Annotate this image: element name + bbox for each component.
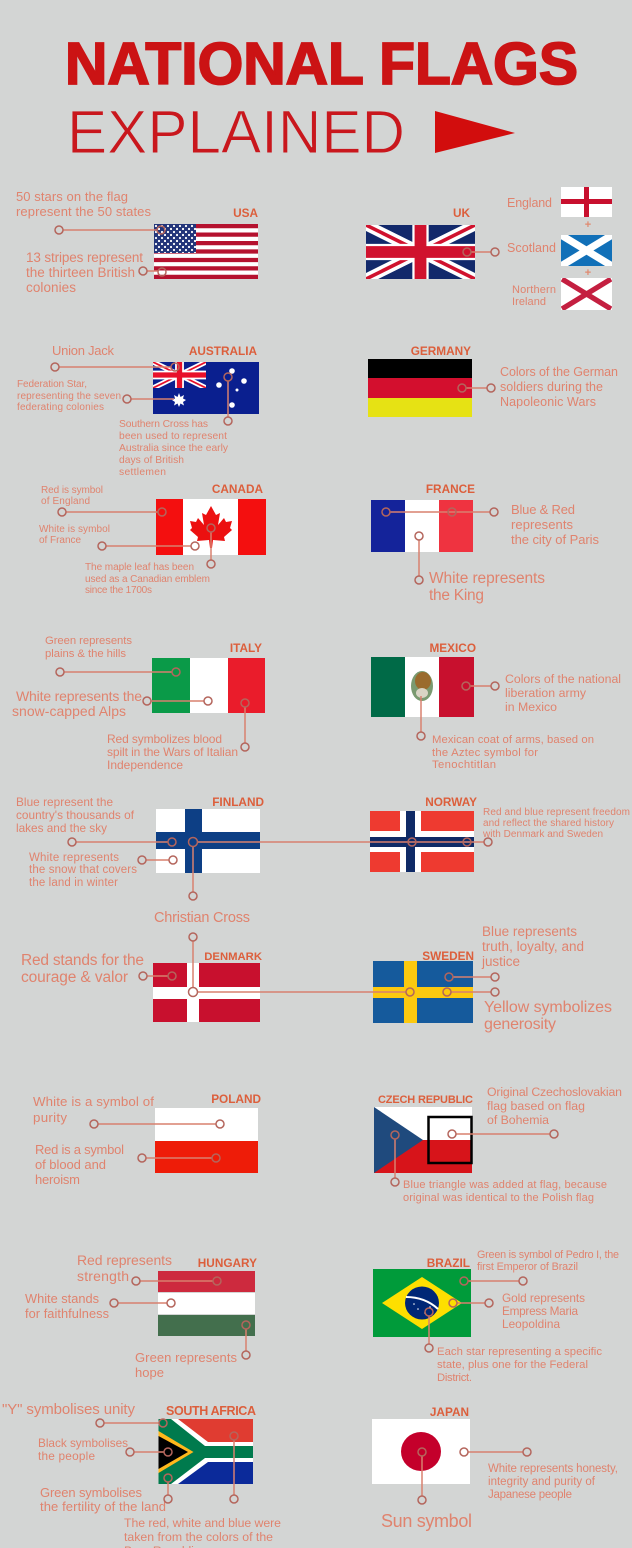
leader: green [164, 1474, 172, 1503]
text: Norway: with Denmark and Sweden [482, 829, 603, 840]
text: black: the people [38, 1449, 95, 1463]
text: stars: 50 stars on the flag [16, 189, 128, 204]
label: Mexico: MEXICO [429, 641, 476, 655]
text: red [21, 952, 144, 986]
flag: Australia [153, 362, 259, 414]
panel: Denmark [21, 933, 263, 1022]
text: coat of arms: Tenochtitlan [432, 759, 496, 771]
text: plus: + [585, 267, 591, 279]
text: black: Black symbolises [38, 1436, 128, 1450]
text: Norway: Red and blue represent freedom [483, 807, 630, 818]
flag: Norway [370, 811, 474, 872]
label: Denmark: DENMARK [204, 951, 263, 963]
text: red: Red represents [77, 1252, 172, 1268]
text: white: for faithfulness [25, 1306, 109, 1321]
text: maple leaf: since the 1700s [85, 585, 152, 596]
text: colors: liberation army [505, 686, 587, 700]
label: Czech Republic: CZECH REPUBLIC [378, 1094, 473, 1106]
text: white: White is symbol [39, 524, 110, 535]
text: unity: "Y" symbolises unity [2, 1401, 136, 1418]
text: white: White represents honesty, [488, 1463, 618, 1475]
text: red: Red is symbol [41, 485, 103, 496]
flag: Mexico [371, 657, 474, 717]
text: red: of blood and [35, 1157, 106, 1172]
text: white: White stands [25, 1291, 99, 1306]
text: Southern Cross: been used to represent [119, 431, 227, 442]
leader: green [56, 668, 180, 676]
panel: Australia [17, 343, 259, 478]
text: Germany: Colors of the German [500, 365, 618, 379]
text: red: Independence [107, 758, 183, 772]
text: coat of arms: the Aztec symbol for [432, 747, 538, 759]
panel: Japan [372, 1405, 618, 1531]
text: gold: Gold represents [502, 1291, 585, 1305]
text: yellow: Yellow symbolizes [484, 999, 612, 1016]
panel: Italy [12, 635, 265, 772]
text: white [488, 1463, 618, 1501]
text: Germany [500, 365, 618, 409]
text: original [487, 1085, 622, 1127]
label: South Africa: SOUTH AFRICA [166, 1404, 256, 1418]
panel: Czech Republic [374, 1085, 622, 1204]
panel: Canada [39, 482, 266, 596]
text: maple leaf: The maple leaf has been [85, 562, 194, 573]
leader: white [143, 697, 212, 705]
flag: USA [154, 224, 258, 279]
leader: Southern Cross [224, 373, 232, 425]
text: white: White represents [429, 570, 545, 587]
text: red: heroism [35, 1172, 80, 1187]
panel: USA [16, 189, 258, 295]
label: Poland: POLAND [211, 1092, 261, 1106]
text: blue and red: the city of Paris [511, 532, 600, 547]
text: red: Red symbolizes blood [107, 732, 222, 746]
text: triangle [403, 1179, 607, 1204]
leader: cross down [189, 847, 197, 900]
text: Southern Cross [119, 419, 229, 478]
text: yellow: generosity [484, 1016, 556, 1033]
text: stripes: the thirteen British [26, 265, 135, 280]
text: star: state, plus one for the Federal [437, 1359, 588, 1371]
text: white: the King [429, 587, 484, 604]
text: blue: Blue represent the [16, 795, 113, 809]
label: USA: USA [233, 206, 258, 220]
text: Germany: soldiers during the [500, 380, 603, 394]
leader: maple leaf [207, 524, 215, 568]
leader: red [58, 508, 166, 516]
leader: white [460, 1448, 531, 1456]
text: Southern Cross: Southern Cross has [119, 419, 208, 430]
text: red white blue: taken from the colors of the [124, 1530, 273, 1544]
text: red: courage & valor [21, 969, 128, 986]
text: white: the land in winter [29, 877, 118, 889]
flag: Northern Ireland [561, 278, 612, 310]
text: blue [481, 924, 584, 969]
panel: Hungary [25, 1252, 257, 1380]
text: plus: + [585, 219, 591, 231]
leader: coat of arms [417, 696, 425, 740]
leader: Union Jack [51, 363, 179, 371]
panel: UK [366, 187, 612, 310]
flag: England [561, 187, 612, 217]
text: red white blue [124, 1516, 281, 1548]
text: white: the snow that covers [29, 864, 137, 876]
text: green: plains & the hills [45, 648, 126, 660]
text: star: District. [437, 1372, 472, 1384]
text: Southern Cross: days of British [119, 455, 184, 466]
text: stripes [26, 250, 143, 295]
text: white: integrity and purity of [488, 1476, 596, 1488]
text: Germany: Napoleonic Wars [500, 395, 596, 409]
panel: Poland [33, 1092, 261, 1187]
leader: green [242, 1321, 250, 1359]
label: Brazil: BRAZIL [427, 1256, 470, 1270]
text: green: hope [135, 1365, 164, 1380]
heading: national flags: NATIONAL FLAGS [65, 31, 578, 97]
leader: original [448, 1130, 558, 1138]
text: blue [16, 795, 135, 835]
text: white [39, 524, 110, 546]
label: Norway: NORWAY [425, 795, 477, 809]
flag: Italy [152, 658, 265, 713]
label: Germany: GERMANY [411, 344, 471, 358]
label: Finland: FINLAND [212, 795, 264, 809]
flag: France [371, 500, 473, 552]
text: red [107, 732, 238, 772]
text: blue: country's thousands of [16, 808, 135, 822]
leader: Denmark to Sweden [188, 988, 414, 996]
flag: Sweden [373, 961, 473, 1023]
flag: Brazil [373, 1269, 471, 1337]
flag: Finland [156, 809, 260, 873]
text: colors [505, 672, 621, 714]
text: Norway: and reflect the shared history [483, 818, 614, 829]
label: Italy: ITALY [230, 641, 262, 655]
text: coat of arms [432, 734, 594, 771]
label: Canada: CANADA [212, 482, 263, 496]
text: blue: truth, loyalty, and [482, 939, 584, 954]
text: green: Green is symbol of Pedro I, the [477, 1249, 619, 1261]
text: red [77, 1252, 172, 1284]
flag: Poland [155, 1108, 258, 1173]
text: blue: justice [481, 954, 520, 969]
text: white [12, 688, 142, 719]
text: red: Red stands for the [21, 952, 144, 969]
panel: Brazil [373, 1249, 619, 1384]
text: sun: Sun symbol [381, 1511, 472, 1531]
leader: blue [445, 973, 499, 981]
text: Scotland: Scotland [507, 241, 556, 255]
text: white [429, 570, 545, 604]
text: green [45, 635, 132, 660]
leader: red [139, 972, 176, 980]
leader: red [138, 1154, 220, 1162]
text: white: snow-capped Alps [12, 703, 126, 719]
flag: Denmark [153, 963, 260, 1022]
text: maple leaf [85, 562, 210, 596]
text: Northern Ireland: Northern [512, 284, 556, 296]
text: colors: Colors of the national [505, 672, 621, 686]
leader: blue [68, 838, 176, 846]
text: white: Japanese people [488, 1489, 572, 1501]
text: England: England [507, 196, 552, 210]
text: red: spilt in the Wars of Italian [107, 745, 238, 759]
leader: green [460, 1277, 527, 1285]
text: original: flag based on flag [487, 1099, 585, 1113]
text: gold: Empress Maria [502, 1304, 578, 1318]
panel: Sweden [373, 924, 612, 1033]
text: green [477, 1249, 619, 1273]
text: white [29, 852, 137, 889]
leader: unity [96, 1419, 167, 1427]
flag: South Africa [158, 1419, 253, 1484]
panel: Mexico [371, 641, 621, 771]
text: red [41, 485, 103, 507]
text: Norway [482, 807, 630, 840]
text: blue and red: Blue & Red [511, 502, 575, 517]
icon: coat of arms [411, 671, 433, 701]
text: stars [16, 189, 152, 219]
text: white: White represents [29, 852, 119, 864]
text: green: the fertility of the land [40, 1499, 166, 1514]
text: green: first Emperor of Brazil [477, 1261, 578, 1273]
text: white [25, 1291, 109, 1321]
leader: stripes [139, 267, 166, 276]
text: white: purity [33, 1110, 67, 1125]
text: gold [502, 1291, 585, 1331]
leader: white [138, 856, 177, 864]
text: red: of England [41, 496, 90, 507]
leader: white [110, 1299, 175, 1307]
text: blue: lakes and the sky [16, 821, 107, 835]
text: green: Green symbolises [40, 1485, 142, 1500]
text: maple leaf: used as a Canadian emblem [85, 574, 210, 585]
text: colors: in Mexico [505, 700, 557, 714]
leader: yellow [443, 988, 499, 996]
text: stripes: colonies [26, 280, 76, 295]
text: original: of Bohemia [487, 1113, 549, 1127]
leader: cross up [189, 933, 197, 988]
panel: Germany [368, 344, 618, 417]
text: red white blue: The red, white and blue were [124, 1516, 281, 1530]
leader: blue and red [382, 508, 498, 516]
leader: white [98, 542, 199, 550]
label: Japan: JAPAN [430, 1405, 469, 1419]
text: green: Green represents [45, 635, 132, 647]
text: blue and red [511, 502, 600, 547]
text: stripes: 13 stripes represent [26, 250, 143, 265]
leader: red [132, 1277, 221, 1285]
leader: black [126, 1448, 172, 1456]
text: Federation Star: representing the seven [17, 391, 121, 402]
text: white: of France [39, 535, 81, 546]
leader: white [415, 532, 423, 584]
flag: Germany [368, 359, 472, 417]
leader: Federation Star [123, 395, 174, 403]
leader: red [241, 699, 249, 751]
flag: Czech Republic [374, 1107, 472, 1173]
text: black [38, 1436, 128, 1463]
title [65, 31, 578, 166]
text: Southern Cross: settlemen [119, 467, 166, 478]
flag: Japan [372, 1419, 470, 1484]
text: Union Jack: Union Jack [52, 343, 114, 358]
text: green [40, 1485, 166, 1514]
panel: Finland [16, 795, 264, 926]
flag: Canada [156, 499, 266, 555]
leader: red white blue [230, 1432, 238, 1503]
text: star [437, 1346, 602, 1384]
text: white [33, 1094, 154, 1125]
text: yellow [484, 999, 612, 1033]
text: green: Green represents [135, 1350, 238, 1365]
text: red: Red is a symbol [35, 1142, 124, 1157]
label: Australia: AUSTRALIA [189, 344, 257, 358]
leader: triangle [391, 1131, 399, 1186]
leader: Germany [458, 384, 495, 392]
leader: Finland to Norway [188, 838, 492, 846]
text: green [135, 1350, 238, 1380]
panel: France [371, 482, 600, 604]
text: triangle: Blue triangle was added at flag, because [403, 1179, 607, 1191]
leader: colors [462, 682, 499, 690]
text: white: White represents the [16, 688, 142, 704]
text: red [35, 1142, 124, 1187]
leader: star [425, 1308, 433, 1352]
text: triangle: original was identical to the Polish flag [403, 1192, 594, 1204]
text: blue: Blue represents [482, 924, 577, 939]
flag: UK [366, 225, 475, 279]
label: Hungary: HUNGARY [198, 1256, 257, 1270]
flag: Hungary [158, 1271, 255, 1336]
text: Federation Star: Federation Star, [17, 379, 87, 390]
leader: gold [449, 1299, 493, 1307]
arrow: title pennant [435, 111, 515, 153]
text: Southern Cross: Australia since the early [119, 443, 229, 454]
panel: Norway [370, 795, 630, 872]
label: UK: UK [453, 206, 470, 220]
text: white: White is a symbol of [33, 1094, 154, 1109]
text: stars: represent the 50 states [16, 204, 152, 219]
label: France: FRANCE [426, 482, 475, 496]
panel: South Africa [2, 1401, 281, 1548]
text: red: strength [77, 1268, 129, 1284]
leader: stars [55, 226, 165, 234]
text: coat of arms: Mexican coat of arms, based on [432, 734, 594, 746]
text: star: Each star representing a specific [437, 1346, 602, 1358]
text: original: Original Czechoslovakian [487, 1085, 622, 1099]
leader: sun [418, 1448, 426, 1504]
leader: white [90, 1120, 224, 1128]
text: Christian Cross: Christian Cross [154, 910, 250, 926]
text: Northern Ireland: Ireland [512, 296, 546, 308]
flag: Scotland [561, 235, 612, 266]
heading: explained: EXPLAINED [67, 98, 405, 166]
text: Federation Star [17, 379, 121, 413]
text: Northern Ireland [512, 284, 556, 308]
leader: UK [463, 248, 499, 256]
text: Federation Star: federating colonies [17, 402, 104, 413]
text: gold: Leopoldina [502, 1317, 560, 1331]
text: blue and red: represents [511, 517, 574, 532]
label: Sweden: SWEDEN [422, 949, 474, 963]
